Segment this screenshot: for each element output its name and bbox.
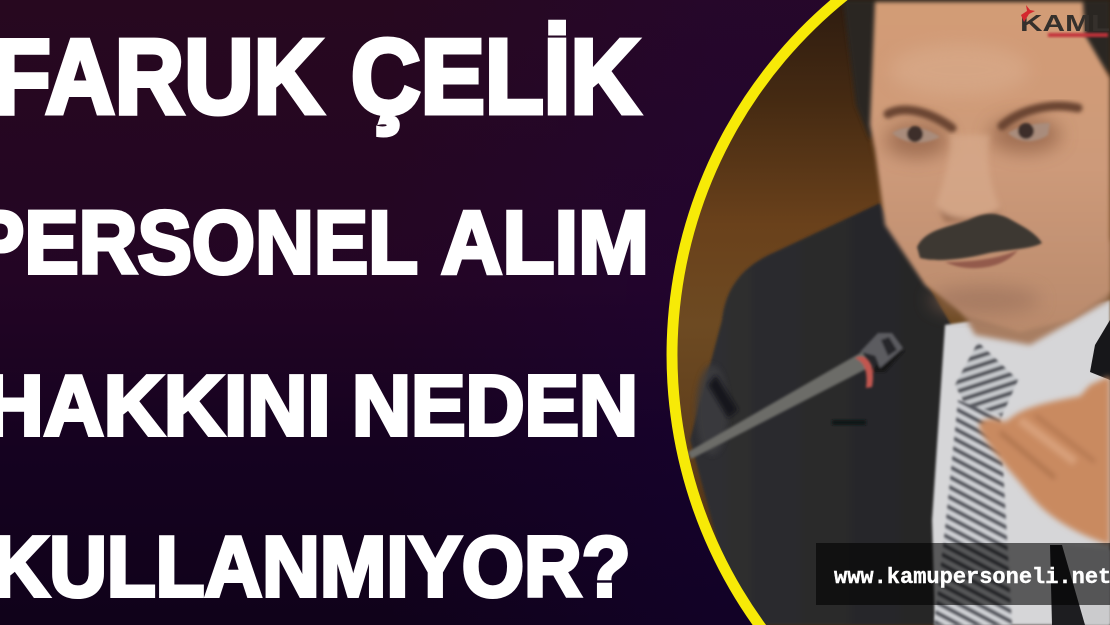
headline line 3: NEDEN — [352, 359, 638, 454]
lips — [945, 250, 1018, 268]
headline line 1: ÇELİK — [351, 18, 640, 136]
mustache — [917, 214, 1042, 260]
sleeve highlight — [696, 365, 728, 455]
shirt cuff — [1080, 550, 1110, 625]
lapel shading — [708, 375, 738, 418]
headline line 1 — [0, 18, 640, 136]
neck — [950, 240, 1110, 345]
dark stripe at lower right — [1050, 545, 1085, 625]
shirt — [932, 300, 1110, 625]
headline — [0, 18, 649, 615]
watermark — [816, 543, 1110, 605]
right eye — [1008, 123, 1050, 141]
right suit edge — [1090, 320, 1110, 380]
eye sockets — [885, 117, 1061, 158]
eyebrows — [888, 106, 1078, 128]
headline line 3 — [0, 359, 638, 454]
wall background — [660, 0, 1110, 625]
chin shadow — [930, 286, 1040, 314]
headline line 1: FARUK — [0, 18, 323, 136]
microphone — [688, 333, 905, 459]
forehead highlight — [898, 48, 1022, 92]
face — [870, 2, 1110, 332]
hand — [979, 376, 1110, 545]
left eye — [892, 126, 940, 143]
logo: KAMU PERSONELI: KAML — [1020, 10, 1110, 36]
photo: man speaking at a microphone — [660, 0, 1110, 625]
yellow ring — [667, 0, 848, 625]
headline line 4: KULLANMIYOR? — [0, 520, 630, 615]
nose — [936, 135, 1003, 222]
necktie — [934, 342, 1018, 625]
watermark: www.kamupersoneli.net — [834, 565, 1110, 590]
hair — [843, 0, 1110, 140]
headline line 2: ALIM — [441, 192, 649, 292]
suit jacket — [690, 203, 1110, 625]
pocket slit — [832, 420, 866, 425]
logo: KAMU PERSONELI — [1020, 5, 1110, 37]
